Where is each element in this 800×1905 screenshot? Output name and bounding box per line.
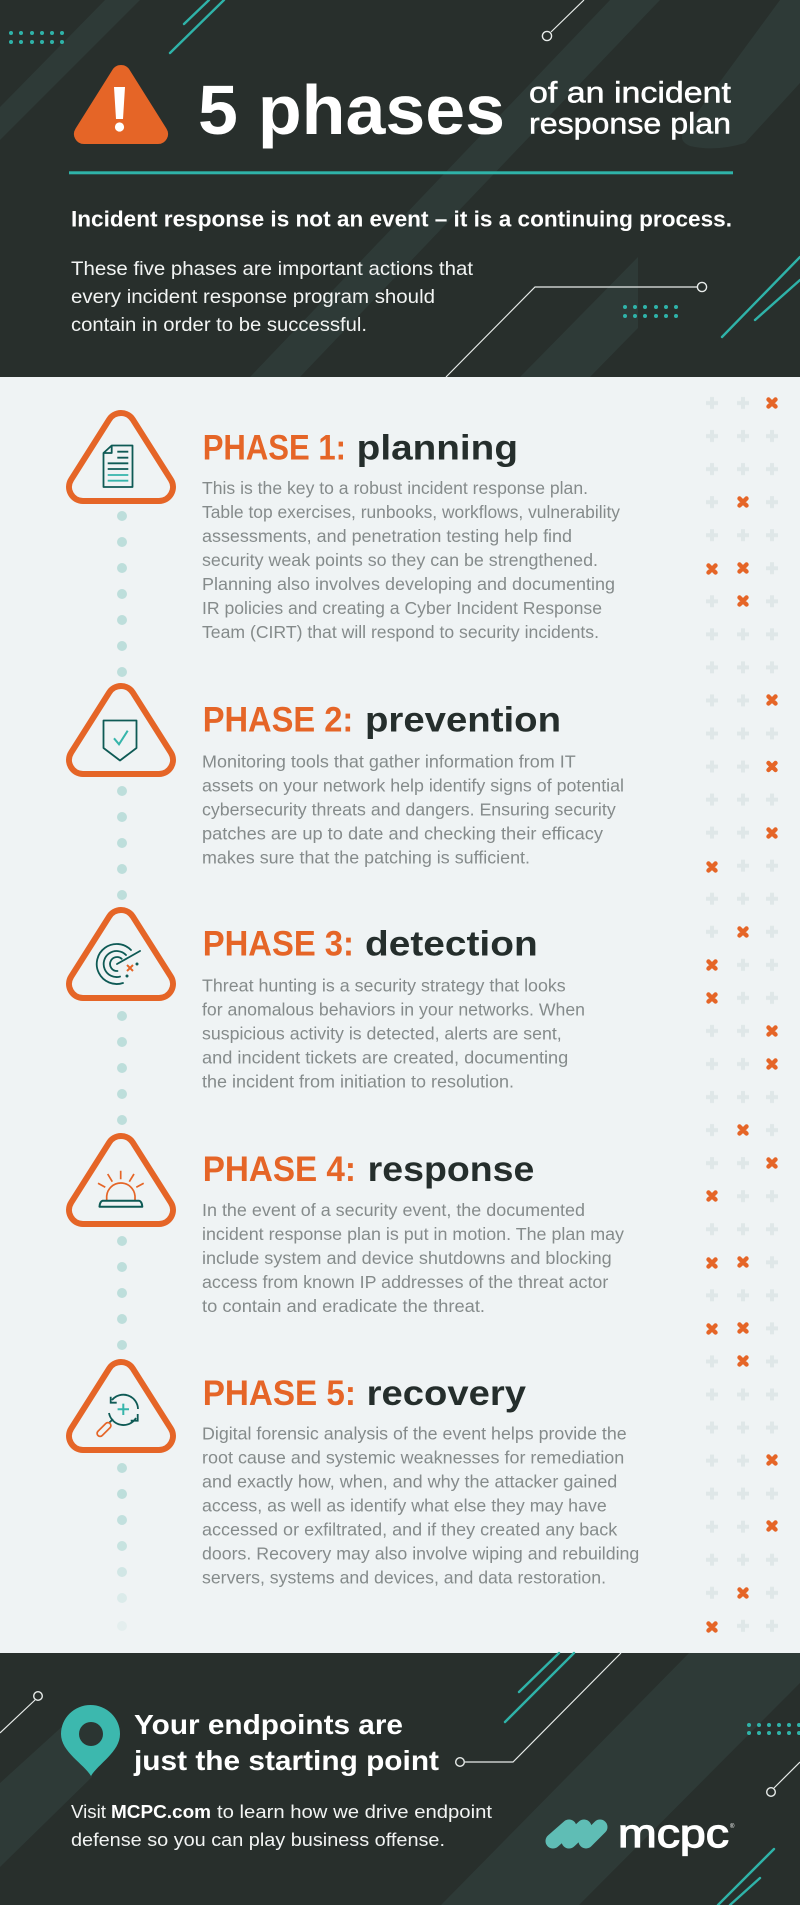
phase 5 text: doors. Recovery may also involve wiping and rebuilding [202,1543,639,1563]
phase 5 text: Digital forensic analysis of the event helps provide the [202,1423,627,1443]
phase 4 heading: PHASE 4: [203,1149,356,1189]
plus and x pattern [700,386,790,1642]
phase 1 text: IR policies and creating a Cyber Incident Response [202,598,602,618]
panel: header [0,0,800,377]
timeline dots [117,511,127,1631]
phase 1 heading: planning [357,427,518,467]
icon: warning triangle [74,65,168,144]
phase 1 text: Table top exercises, runbooks, workflows, vulnerability [202,502,620,522]
phase 3 heading: detection [365,924,538,964]
phase 5 text: accessed or exfiltrated, and if they created any back [202,1519,618,1539]
phase 5 text: and exactly how, when, and why the attacker gained [202,1471,617,1491]
phase 2 heading: PHASE 2: [203,700,353,740]
phase 5 text [202,1423,639,1587]
phase 3 text: the incident from initiation to resolution. [202,1072,514,1092]
phase 5 text: root cause and systemic weaknesses for remediation [202,1447,624,1467]
icon: phase 1 document [69,413,173,501]
phase 5 heading: PHASE 5: [203,1373,356,1413]
phase 4 text: incident response plan is put in motion. The plan may [202,1224,624,1244]
icon: phase 5 recovery [69,1362,173,1450]
panel: phases background [0,377,800,1653]
phase 2 text: cybersecurity threats and dangers. Ensuring security [202,799,616,819]
phase 4 heading: response [368,1149,534,1189]
phase 3 text: for anomalous behaviors in your networks. When [202,1000,585,1020]
phase 2 heading [203,700,561,740]
phase 1 text: assessments, and penetration testing help find [202,526,572,546]
logo: mcpc: ® [730,1823,735,1830]
phase 4 text: to contain and eradicate the threat. [202,1296,485,1316]
intro text: contain in order to be successful. [71,314,367,336]
icon: phase 2 shield [69,686,173,774]
phase 1 heading [203,427,518,467]
phase 2 text: makes sure that the patching is sufficient. [202,847,530,867]
footer heading [133,1709,439,1776]
phase 3 heading [203,924,538,964]
phase 2 text: Monitoring tools that gather information from IT [202,751,576,771]
phase 5 text: servers, systems and devices, and data restoration. [202,1567,606,1587]
title: response plan [529,108,731,140]
footer text: MCPC.com [111,1801,211,1822]
phase 4 text: include system and device shutdowns and blocking [202,1248,612,1268]
phase 1 text: Planning also involves developing and documenting [202,574,615,594]
phase 3 text [202,976,585,1092]
phase 4 text [202,1200,624,1316]
phase 5 heading: recovery [367,1373,526,1413]
phase 5 heading [203,1373,526,1413]
title: of an incident [529,76,732,110]
phase 2 text: patches are up to date and checking their efficacy [202,823,603,843]
phase 4 text: access from known IP addresses of the threat actor [202,1272,609,1292]
footer heading: just the starting point [133,1745,439,1776]
logo: mcpc [553,1812,735,1856]
icon: location pin [61,1705,120,1776]
footer text: Visit [71,1801,106,1822]
logo: mcpc: mcpc [618,1812,729,1856]
subheading: Incident response is not an event – it is a continuing process. [71,206,732,232]
title: 5 phases [198,71,505,149]
phase 4 text: In the event of a security event, the documented [202,1200,585,1220]
panel: footer [0,1653,800,1905]
phase 3 text: and incident tickets are created, documenting [202,1048,568,1068]
intro text: every incident response program should [71,286,435,308]
footer text: to learn how we drive endpoint [217,1801,492,1822]
intro text: These five phases are important actions that [71,258,474,280]
phase 1 text: This is the key to a robust incident response plan. [202,478,588,498]
icon: phase 3 radar [69,910,173,998]
phase 4 heading [203,1149,534,1189]
phase 1 heading: PHASE 1: [203,427,346,467]
footer text [71,1801,492,1850]
phase 3 heading: PHASE 3: [203,924,354,964]
icon: phase 4 alarm [69,1136,173,1224]
phase 2 text [202,751,624,867]
title divider [69,171,733,174]
title [198,71,732,149]
intro text [71,258,474,336]
footer text: defense so you can play business offense. [71,1829,445,1850]
phase 1 text: security weak points so they can be strengthened. [202,550,598,570]
phase 2 heading: prevention [365,700,561,740]
phase 3 text: Threat hunting is a security strategy that looks [202,976,566,996]
phase 5 text: access, as well as identify what else they may have [202,1495,607,1515]
phase 1 text [202,478,620,642]
phase 2 text: assets on your network help identify signs of potential [202,775,624,795]
footer heading: Your endpoints are [134,1709,403,1740]
phase 1 text: Team (CIRT) that will respond to security incidents. [202,622,599,642]
phase 3 text: suspicious activity is detected, alerts are sent, [202,1024,562,1044]
